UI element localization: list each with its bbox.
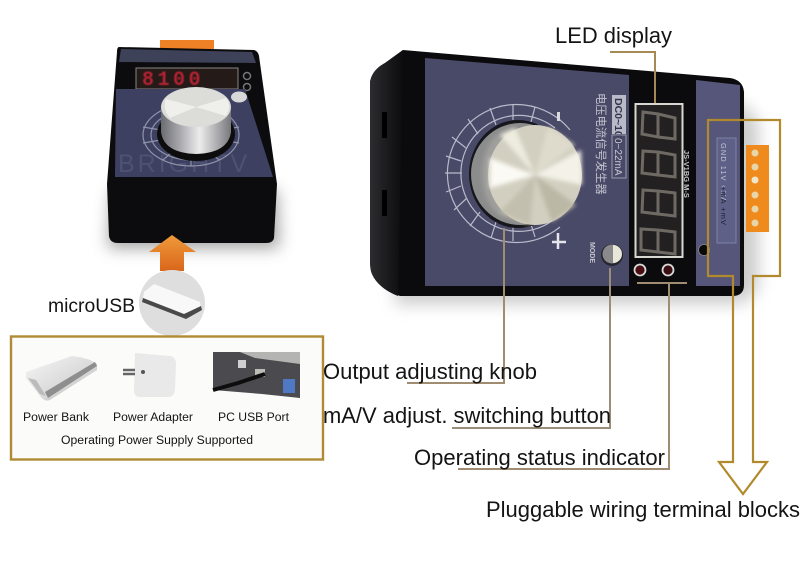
chinese product title: DC0~10V (612, 98, 624, 144)
label: terminal blocks: Pluggable wiring terminal blocks (486, 497, 800, 522)
label: status indicator: Operating status indicator (414, 445, 665, 470)
small device LED display (136, 68, 238, 92)
arrow: microUSB up arrow (149, 235, 196, 271)
photo: large device (370, 50, 769, 304)
icon: power adapter (123, 353, 176, 397)
orange terminal block (746, 145, 769, 232)
LED display (636, 104, 682, 257)
chinese product title: 电压电流信号发生器 (594, 93, 608, 195)
orange terminal on small device (160, 40, 214, 49)
photo: small device front view: BRIGHTV (118, 150, 250, 178)
small device LED display: 8100 (142, 69, 204, 92)
icon: microUSB connector (139, 270, 205, 336)
label: switching button: mA/V adjust. switching button (323, 403, 611, 428)
callout line: output knob (407, 228, 504, 383)
label: microUSB: microUSB (48, 296, 135, 317)
mode button: MODE (588, 242, 595, 263)
panel: operating power supply (11, 336, 323, 460)
small device knob (157, 87, 235, 161)
photo: large device: JS-V1BG M-S (682, 150, 691, 198)
panel: operating power supply: Power Adapter (113, 412, 193, 424)
terminal legend: GND 11V +1V (719, 143, 728, 201)
icon: power bank (26, 356, 97, 401)
panel: operating power supply: Operating Power Supply Supported (61, 435, 253, 447)
knob (469, 120, 582, 228)
icon: laptop usb port (213, 352, 300, 398)
panel: operating power supply: PC USB Port (218, 412, 290, 424)
small device button (231, 92, 247, 102)
dial scale (445, 104, 570, 242)
label: LED display: LED display (555, 23, 672, 48)
callout line: mode button (452, 268, 610, 428)
mode button (588, 242, 623, 266)
chinese product title: 0~22mA (612, 138, 623, 176)
photo: small device front view (107, 40, 279, 248)
plus sign (552, 233, 566, 249)
terminal legend (717, 138, 736, 243)
terminal legend: +mA +mV (719, 186, 728, 226)
status LEDs (634, 264, 674, 276)
panel: operating power supply: Power Bank (23, 412, 89, 424)
arrow: pluggable terminal callout (708, 120, 780, 494)
callout line: LED display (610, 52, 655, 103)
label: output adjusting knob: Output adjusting knob (323, 359, 537, 384)
callout line: status indicator (458, 283, 687, 469)
small device dial scale (143, 104, 239, 166)
chinese product title (594, 93, 626, 195)
